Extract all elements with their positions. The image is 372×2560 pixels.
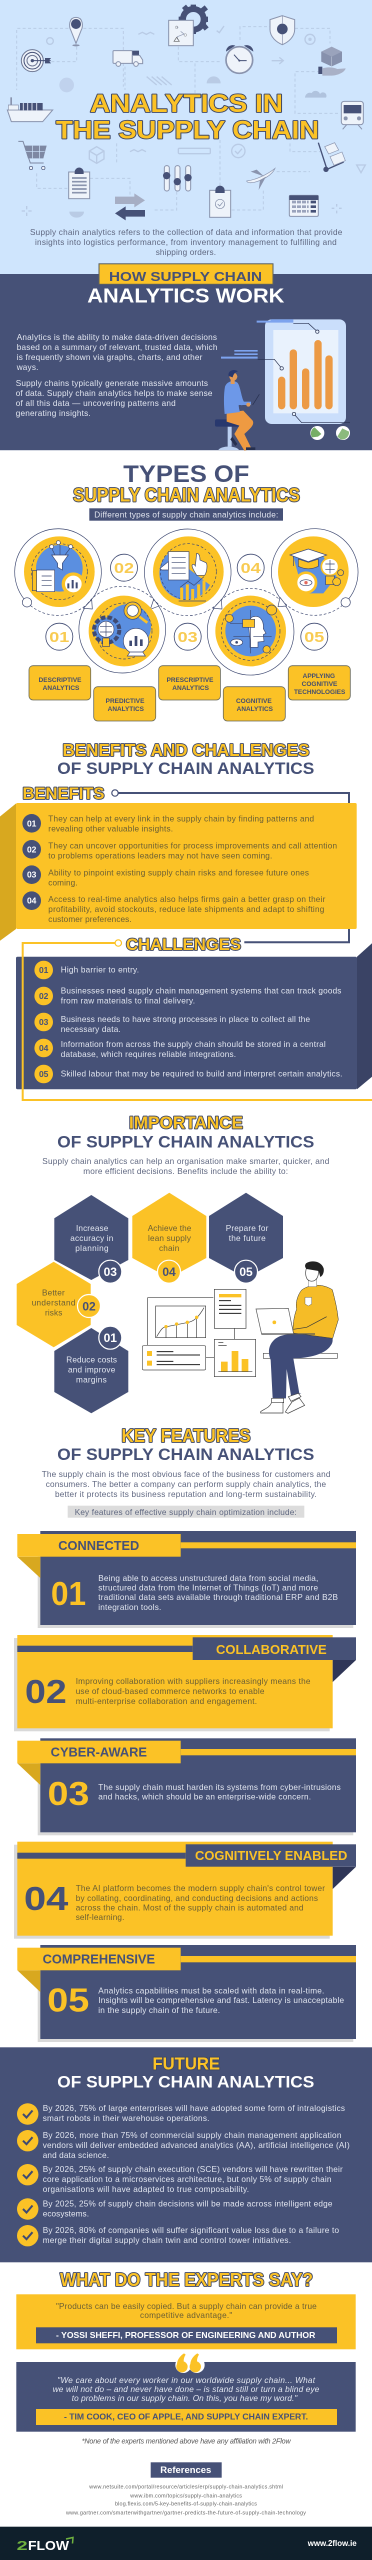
card 05: comprehensive: COMPREHENSIVE — [43, 1952, 155, 1966]
benefit 02: They can uncover opportunities for process improvements and call attention — [48, 842, 337, 850]
heading: benefits and challenges: BENEFITS AND CHALLENGES — [62, 740, 310, 760]
key features intro: consumers. The better a company can perform supply chain analytics, the — [46, 1480, 326, 1489]
prediction 1: smart robots in their warehouse operations. — [43, 2114, 209, 2123]
benefit 01: revealing other valuable insights. — [48, 824, 173, 834]
prediction 5: merge their digital supply chain twin and control tower initiatives. — [43, 2236, 291, 2245]
challenge 04: Information from across the supply chain should be stored in a central — [61, 1040, 326, 1049]
challenge 03: Business needs to have strong processes in place to collect all the — [61, 1015, 310, 1024]
hexagon 03: increase accuracy: 03 — [104, 1265, 117, 1279]
illustration: person with laptop — [256, 1261, 338, 1413]
card 05: comprehensive: in the supply chain of the future. — [98, 2006, 220, 2015]
icon: parcel in hand — [318, 47, 346, 76]
step numbers: 05 — [304, 629, 324, 646]
importance intro: Supply chain analytics can help an organisation make smarter, quicker, and — [42, 1157, 330, 1166]
label: predictive analytics: ANALYTICS — [108, 706, 144, 713]
card 04: cognitively enabled: by collating, coordinating, and conducting decisions and actions — [76, 1894, 318, 1903]
icon: aeroplane — [247, 168, 275, 190]
label: prescriptive analytics — [159, 666, 220, 700]
quote card: Tim Cook: "We care about every worker in our worldwide supply chain... What — [57, 2376, 316, 2385]
card 03: cyber-aware: The supply chain must harden its systems from cyber-intrusions — [98, 1783, 341, 1792]
hexagon 03: increase accuracy — [54, 1195, 128, 1283]
card 05: comprehensive: 05 — [47, 1982, 89, 2019]
heading: future — [57, 2054, 314, 2091]
challenge 04 — [34, 1039, 326, 1059]
heading: importance: IMPORTANCE — [129, 1113, 243, 1133]
prediction 4: ecosystems. — [43, 2210, 89, 2218]
hexagon 05: prepare for the future — [209, 1193, 283, 1283]
prediction 2: and data science. — [43, 2151, 109, 2160]
heading: importance — [57, 1113, 314, 1151]
references: blog.flexis.com/5-key-benefits-of-supply-chain-analytics — [115, 2502, 257, 2508]
label: descriptive analytics — [29, 666, 91, 700]
main title: ANALYTICS IN — [90, 90, 283, 118]
process rings and connectors — [15, 529, 358, 675]
label: applying cognitive technologies — [288, 666, 350, 700]
card 02: collaborative: COLLABORATIVE — [216, 1643, 327, 1657]
label: predictive analytics — [94, 687, 156, 721]
label: cognitive analytics: COGNITIVE — [236, 698, 272, 705]
text block: analytics explained: based on a summary of relevant, trusted data, which — [17, 343, 218, 352]
challenge 01: High barrier to entry. — [61, 966, 139, 974]
ring 3: prescriptive icon — [153, 536, 224, 607]
references: www.ibm.com/topics/supply-chain-analytics — [129, 2493, 242, 2499]
challenge 02: Businesses need supply chain management systems that can track goods — [61, 986, 341, 996]
icon: train — [341, 101, 363, 129]
illustration: data dashboards — [142, 1289, 256, 1377]
benefit 01: They can help at every link in the supply chain by finding patterns and — [48, 814, 314, 824]
icon: quotation marks — [175, 2353, 205, 2373]
label: predictive analytics: PREDICTIVE — [106, 698, 144, 705]
card 05: comprehensive: Analytics capabilities must be scaled with data in real-time. — [98, 1986, 324, 1996]
logo: 2FLOW: FLOW — [28, 2538, 70, 2553]
heading: types of — [73, 461, 300, 506]
benefit 02: to problems operations leaders may not have seen coming. — [48, 852, 272, 860]
references: www.netsuite.com/portal/resource/articles/erp/supply-chain-analytics.shtml — [88, 2485, 283, 2491]
heading: future: FUTURE — [152, 2054, 220, 2074]
icon: target — [21, 50, 51, 72]
prediction 3 — [17, 2164, 343, 2194]
icon: calendar — [289, 195, 318, 216]
importance intro: more efficient decisions. Benefits include the ability to: — [83, 1167, 288, 1176]
icon: cargo ship — [7, 97, 53, 122]
card 01: connected — [17, 1531, 356, 1628]
logo: 2FLOW — [17, 2538, 73, 2553]
prediction 5 — [17, 2225, 339, 2246]
card 02: collaborative: use of cloud-based commerce networks to enable — [76, 1687, 265, 1696]
benefit 01 — [22, 814, 314, 834]
icon: clipboard list — [69, 167, 90, 199]
illustration: analyst on stool — [215, 370, 259, 451]
references: www.gartner.com/smarterwithgartner/gartner-predicts-the-future-of-supply-chain-technology — [65, 2510, 306, 2516]
challenge 01: 01 — [39, 965, 49, 975]
step numbers: 01 — [49, 629, 69, 646]
icon: sliders — [163, 166, 192, 191]
benefit 02 — [22, 840, 337, 860]
card 02: collaborative: 02 — [25, 1673, 67, 1710]
benefit 03: 03 — [27, 870, 37, 880]
icon: location pin — [70, 17, 82, 46]
hexagon 05: prepare for the future: the future — [229, 1234, 266, 1243]
prediction 2 — [17, 2130, 350, 2160]
challenge 03: necessary data. — [61, 1025, 121, 1034]
intro text — [30, 228, 343, 257]
card 01: connected: Being able to access unstructured data from social media, — [98, 1574, 318, 1583]
panel: key features — [14, 1426, 356, 2042]
challenge 04: database, which requires reliable integrations. — [61, 1050, 236, 1059]
challenge 03 — [34, 1013, 310, 1034]
quote card: Tim Cook — [16, 2362, 356, 2432]
text block: analytics explained: of all this data — uncovering patterns and — [16, 399, 176, 408]
hexagon 01: reduce costs: Reduce costs — [66, 1356, 117, 1364]
card 04: cognitively enabled: across the chain. Most of the supply chain is automated and — [76, 1904, 304, 1912]
challenge 02: 02 — [39, 991, 49, 1001]
label: applying cognitive technologies: TECHNOLOGIES — [294, 689, 345, 696]
challenge 05: Skilled labour that may be required to build and interpret certain analytics. — [61, 1070, 342, 1078]
label: cognitive analytics: ANALYTICS — [237, 706, 273, 713]
quote card: Tim Cook: to problems in our supply chain. On this, you have my word." — [72, 2394, 298, 2403]
benefit 02: 02 — [27, 844, 37, 854]
card 04: cognitively enabled: self-learning. — [76, 1913, 124, 1922]
text block: analytics explained: Supply chains typically generate massive amounts — [16, 379, 208, 388]
panel: future of supply chain analytics — [0, 2047, 372, 2262]
challenge 02: from raw materials to final delivery. — [61, 996, 195, 1006]
icon: shield — [270, 16, 295, 45]
hexagon 03: increase accuracy: accuracy in — [70, 1234, 114, 1243]
main title — [56, 90, 319, 144]
website address: www.2flow.ie — [307, 2539, 357, 2548]
prediction 4: By 2025, 25% of supply chain decisions will be made across intelligent edge — [43, 2200, 333, 2208]
heading: future: OF SUPPLY CHAIN ANALYTICS — [57, 2073, 314, 2091]
step numbers — [46, 554, 328, 650]
quote card: Yossi Sheffi: competitive advantage." — [140, 2311, 232, 2320]
benefit 03: Ability to pinpoint existing supply chain risks and foresee future ones — [48, 868, 309, 878]
text block: analytics explained: generating insights. — [16, 409, 91, 418]
heading: importance: OF SUPPLY CHAIN ANALYTICS — [57, 1133, 314, 1151]
intro text: insights into logistics performance, from inventory management to fulfilling and — [35, 238, 337, 247]
card 05: comprehensive — [17, 1945, 356, 2042]
ring 5: cognitive technologies icon — [278, 536, 349, 607]
card 04: cognitively enabled: COGNITIVELY ENABLED — [195, 1849, 347, 1863]
hexagon 03: increase accuracy: Increase — [76, 1224, 109, 1233]
prediction 3: By 2026, 25% of supply chain execution (SCE) vendors will have rewritten their — [43, 2165, 343, 2174]
panel: challenges — [16, 936, 372, 1100]
icon: exchange arrows — [115, 193, 145, 220]
hexagon 01: reduce costs — [54, 1326, 128, 1413]
hexagon 02: better understand risks: understand — [32, 1298, 76, 1308]
hexagon 02: better understand risks: 02 — [82, 1299, 96, 1313]
heading: benefits and challenges — [57, 740, 314, 778]
hexagon 05: prepare for the future: 05 — [239, 1265, 253, 1279]
label: cognitive analytics — [223, 687, 285, 721]
prediction 2: By 2026, more than 75% of commercial supply chain management application — [43, 2131, 342, 2140]
card 03: cyber-aware — [17, 1738, 356, 1835]
hero background network — [17, 26, 365, 218]
step numbers: 04 — [241, 560, 261, 577]
text block: analytics explained: is frequently shown via graphs, charts, and other — [17, 353, 203, 362]
step numbers: 02 — [114, 560, 134, 577]
text block: analytics explained: ways. — [16, 363, 38, 372]
intro text: Supply chain analytics refers to the collection of data and information that provide — [30, 228, 343, 237]
panel: importance — [17, 1113, 338, 1413]
benefit 04: profitability, avoid stockouts, reduce late shipments and adapt to shifting — [48, 905, 325, 914]
card 03: cyber-aware: and hacks, which should be an enterprise-wide concern. — [98, 1792, 311, 1802]
card 02: collaborative — [14, 1635, 356, 1731]
hexagon 04: lean supply chain: chain — [159, 1244, 180, 1253]
icon: hand truck — [318, 143, 345, 172]
hexagon 03: increase accuracy: planning — [75, 1244, 109, 1253]
sub-heading banner — [89, 508, 283, 521]
text block: analytics explained — [16, 333, 218, 418]
card 01: connected: traditional data sets available through traditional ERP and B2B — [98, 1593, 339, 1602]
hexagon 01: reduce costs: margins — [76, 1376, 107, 1384]
hexagon 01: reduce costs: 01 — [104, 1331, 117, 1345]
challenge 05 — [34, 1065, 342, 1083]
prediction 1: By 2026, 75% of large enterprises will have adopted some form of intralogistics — [43, 2104, 345, 2113]
text block: analytics explained: Analytics is the ability to make data-driven decisions — [17, 333, 217, 342]
main title: THE SUPPLY CHAIN — [56, 116, 319, 144]
challenges heading: CHALLENGES — [126, 936, 241, 954]
card 01: connected: structured data from the Internet of Things (IoT) and more — [98, 1584, 318, 1592]
label: descriptive analytics: DESCRIPTIVE — [39, 677, 81, 684]
card 01: connected: integration tools. — [98, 1603, 161, 1612]
challenge 05: 05 — [39, 1069, 49, 1079]
hexagon 01: reduce costs: and improve — [68, 1366, 116, 1374]
icon: alarm clock — [226, 45, 253, 73]
benefit 04 — [22, 891, 326, 924]
icon: delivery truck — [113, 51, 143, 66]
benefit 03: coming. — [48, 878, 78, 888]
challenge 01 — [34, 961, 139, 979]
icon: shopping cart — [18, 141, 47, 170]
card 04: cognitively enabled: 04 — [24, 1880, 69, 1917]
label: prescriptive analytics: PRESCRIPTIVE — [167, 677, 213, 684]
hexagon 04: lean supply chain: Achieve the — [148, 1224, 192, 1233]
label: descriptive analytics: ANALYTICS — [43, 685, 79, 692]
panel: how supply chain analytics work — [0, 264, 372, 451]
benefit 01: 01 — [27, 818, 37, 828]
hexagon 04: lean supply chain: lean supply — [148, 1234, 192, 1243]
panel: what do the experts say — [16, 2270, 356, 2446]
heading: types of: SUPPLY CHAIN ANALYTICS — [73, 486, 300, 506]
prediction 1 — [17, 2103, 345, 2125]
benefits heading: BENEFITS — [22, 785, 104, 803]
disclaimer note: *None of the experts mentioned above have any affiliation with 2Flow — [82, 2436, 291, 2446]
chart illustration: tablet with bars — [221, 319, 350, 440]
footer — [0, 2527, 372, 2560]
hero panel — [0, 0, 372, 274]
prediction 3: organisations will have adapted to true composability. — [43, 2185, 249, 2194]
importance intro — [42, 1157, 330, 1176]
card 03: cyber-aware: CYBER-AWARE — [51, 1746, 147, 1760]
intro text: shipping orders. — [156, 248, 216, 257]
heading: key features: KEY FEATURES — [122, 1426, 250, 1446]
heading banner: HOW SUPPLY CHAIN — [109, 269, 262, 284]
prediction 4 — [17, 2198, 333, 2220]
text block: analytics explained: of data. Supply chain analytics helps to make sense — [16, 389, 213, 398]
key features intro — [42, 1470, 331, 1499]
card 03: cyber-aware: 03 — [48, 1775, 89, 1812]
key features intro: The supply chain is the most obvious face of the business for customers and — [42, 1470, 331, 1479]
card 04: cognitively enabled: The AI platform becomes the modern supply chain's control tower — [76, 1884, 325, 1893]
prediction 3: core application to a microservices architecture, but only 5% of supply chain — [43, 2175, 332, 2184]
card 02: collaborative: multi-enterprise collaboration and engagement. — [76, 1697, 257, 1706]
sub-heading banner: Different types of supply chain analytics include: — [94, 510, 278, 519]
benefit 04: customer preferences. — [48, 915, 132, 924]
heading: key features: OF SUPPLY CHAIN ANALYTICS — [57, 1446, 314, 1464]
prediction 5: By 2026, 80% of companies will suffer significant value loss due to a failure to — [43, 2226, 339, 2235]
card 05: comprehensive: Insights will be comprehensive and fast. Latency is unacceptable — [98, 1996, 344, 2005]
hexagon 02: better understand risks: Better — [42, 1288, 65, 1298]
card 01: connected: 01 — [51, 1575, 86, 1612]
heading: benefits and challenges: OF SUPPLY CHAIN ANALYTICS — [57, 760, 314, 778]
card 02: collaborative: Improving collaboration with suppliers increasingly means the — [76, 1677, 311, 1686]
heading banner — [99, 264, 273, 284]
quote card: Tim Cook: we will not do – and never have done – is stand still or turn a blind eye — [53, 2385, 320, 2394]
hexagon 04: lean supply chain: 04 — [162, 1265, 176, 1279]
label: applying cognitive technologies: APPLYING — [303, 673, 335, 680]
references — [65, 2462, 306, 2516]
key features sub-heading: Key features of effective supply chain optimization include: — [75, 1508, 297, 1517]
hexagon 02: better understand risks: risks — [45, 1308, 62, 1318]
label: prescriptive analytics: ANALYTICS — [172, 685, 209, 692]
icon: checked clipboard — [210, 186, 231, 217]
step numbers: 03 — [178, 629, 198, 646]
benefit 04: 04 — [27, 896, 37, 906]
challenge 04: 04 — [39, 1043, 49, 1053]
heading: experts: WHAT DO THE EXPERTS SAY? — [60, 2270, 313, 2290]
logo: 2FLOW: 2 — [17, 2538, 28, 2553]
heading: key features — [57, 1426, 314, 1464]
hexagon 04: lean supply chain — [132, 1193, 206, 1283]
quote card: Tim Cook: - TIM COOK, CEO OF APPLE, AND SUPPLY CHAIN EXPERT. — [64, 2411, 308, 2421]
challenge 02 — [34, 986, 341, 1006]
panel: types of supply chain analytics — [15, 461, 358, 721]
card 04: cognitively enabled — [14, 1842, 356, 1939]
hexagon 05: prepare for the future: Prepare for — [226, 1224, 269, 1233]
challenge 03: 03 — [39, 1017, 49, 1027]
heading: types of: TYPES OF — [123, 461, 249, 488]
panel: benefits — [0, 785, 357, 942]
label: applying cognitive technologies: COGNITIVE — [302, 681, 337, 688]
card 01: connected: CONNECTED — [58, 1539, 139, 1553]
references: References — [160, 2465, 211, 2476]
icon: gear and map — [169, 5, 209, 46]
prediction 2: vendors will deliver embedded advanced analytics (AA), artificial intelligence (AI) — [43, 2141, 350, 2150]
ring 2: predictive icon — [89, 596, 159, 666]
benefit 04: Access to real-time analytics also helps firms gain a better grasp on their — [48, 895, 326, 904]
quote card: Yossi Sheffi — [16, 2294, 356, 2349]
ring 1: descriptive icon — [24, 536, 95, 607]
quote card: Yossi Sheffi: "Products can be easily copied. But a supply chain can provide a true — [56, 2302, 317, 2311]
key features intro: better it protects its business reputation and long-term sustainability. — [55, 1490, 317, 1499]
benefit 03 — [22, 865, 309, 888]
quote card: Yossi Sheffi: - YOSSI SHEFFI, PROFESSOR OF ENGINEERING AND AUTHOR — [56, 2330, 315, 2340]
heading: analytics work: ANALYTICS WORK — [87, 286, 285, 308]
hexagon 02: better understand risks — [17, 1262, 101, 1347]
ring 4: cognitive icon — [215, 596, 286, 666]
